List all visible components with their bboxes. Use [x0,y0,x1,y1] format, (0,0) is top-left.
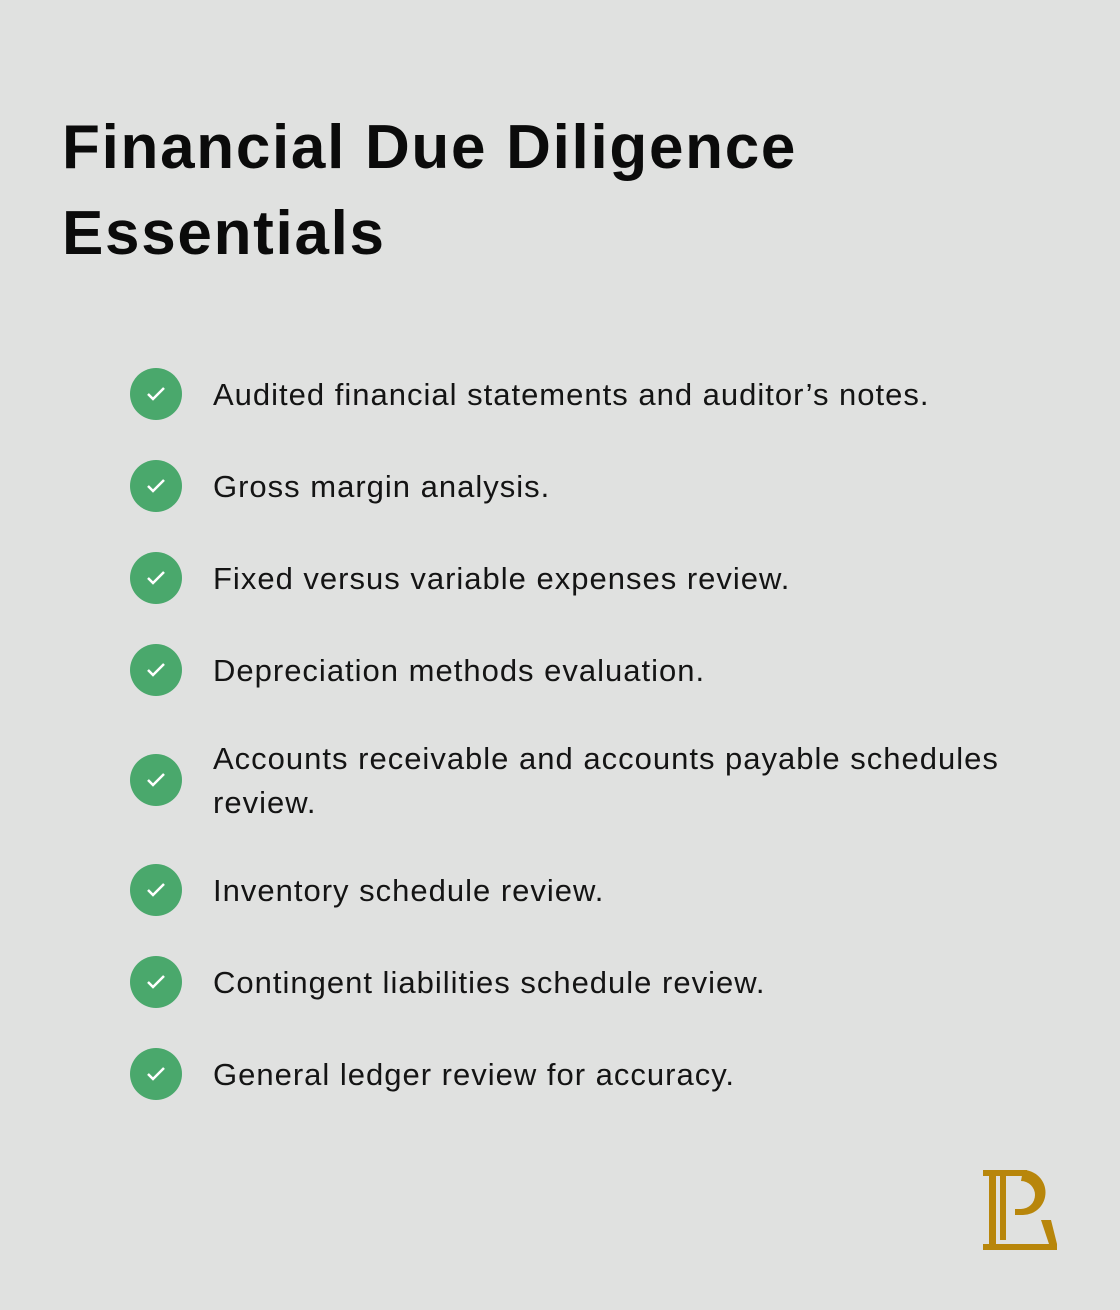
item 2 [130,460,550,512]
item 7 [130,956,766,1008]
item 8 [130,1048,735,1100]
item 1 [130,368,930,420]
item 4 [130,644,705,696]
title [62,113,797,268]
item 6 [130,864,604,916]
item 7: Contingent liabilities schedule review. [213,965,766,1000]
item 3 [130,552,790,604]
item 6: Inventory schedule review. [213,873,604,908]
title: Financial Due Diligence [62,113,797,182]
logo [983,1170,1057,1250]
item 5: Accounts receivable and accounts payable schedules review. [213,741,999,820]
item 3: Fixed versus variable expenses review. [213,561,790,596]
item 8: General ledger review for accuracy. [213,1057,735,1092]
item 1: Audited financial statements and auditor’s notes. [213,377,930,412]
item 2: Gross margin analysis. [213,469,550,504]
title: Essentials [62,199,386,268]
item 4: Depreciation methods evaluation. [213,653,705,688]
